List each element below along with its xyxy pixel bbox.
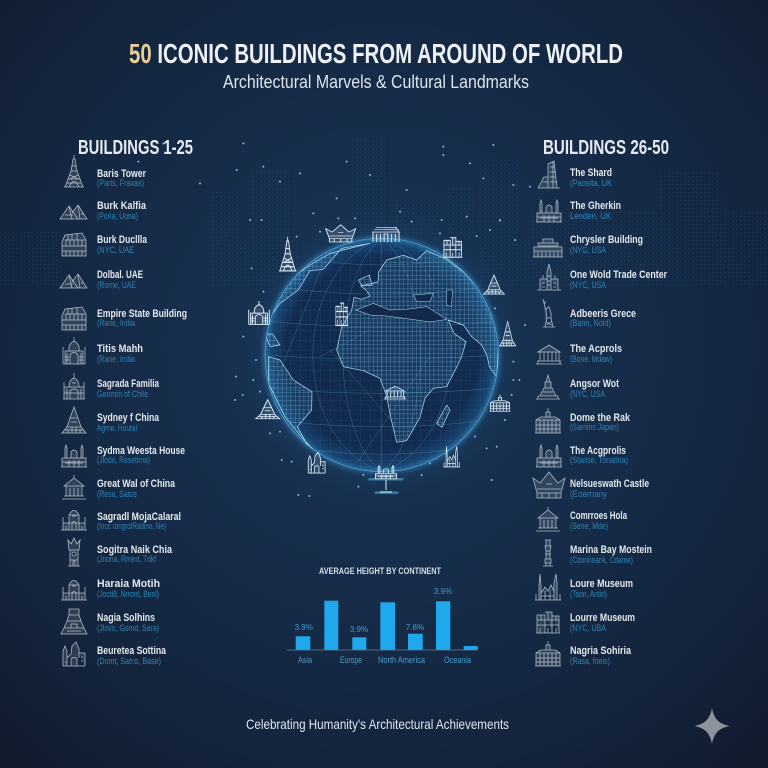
landmark: gate — [367, 227, 407, 244]
entry: Beuretea Sottina: (Domt, Satns, Base) — [97, 656, 161, 666]
globe grid lines — [263, 237, 500, 473]
entry: Burk Ducllla — [62, 233, 148, 256]
entry: Baris Tower — [64, 155, 147, 188]
entry: Burk Kalfia: (Porla, Uona) — [97, 211, 138, 221]
heading: buildings 26-50: BUILDINGS 26-50 — [543, 137, 669, 159]
continent labels: North America — [378, 655, 426, 666]
entry: The Acgprolis: (Stanse, Tonatina) — [570, 455, 628, 465]
entry: Beuretea Sottina — [63, 642, 167, 666]
entry: Empire State Building — [62, 307, 187, 330]
marker line on horn of africa — [438, 367, 469, 371]
landmark: building on africa — [380, 386, 410, 400]
entry: Chrysler Building: (NYG, USA — [570, 245, 606, 255]
South America — [268, 356, 314, 450]
entry: Angsor Wot — [536, 375, 619, 399]
landmark: pagoda — [480, 275, 507, 296]
entry: Chrysler Building: Chrysler Building — [570, 234, 643, 246]
entry: Lourre Museum — [536, 612, 635, 633]
entry: Chrysler Building — [533, 234, 643, 257]
entry: Loure Museum — [535, 574, 633, 600]
entry: Sagradl MojaCalaral: Sagradl MojaCalaral — [97, 511, 181, 523]
chart title: AVERAGE HEIGHT BY CONTINENT — [319, 566, 441, 577]
bars — [296, 601, 478, 650]
globe halo — [235, 208, 528, 502]
value labels: 3.9% — [295, 623, 313, 632]
sphere rim glow — [265, 238, 498, 472]
entry: Empire State Building: Empire State Building — [97, 308, 187, 320]
entry: Comrroes Hola: (Sene, Mde) — [570, 521, 608, 531]
subtitle: Architectural Marvels & Cultural Landmarks — [223, 72, 529, 92]
landmark: stupa — [498, 322, 520, 348]
entry: Adbeeris Grece — [543, 299, 636, 328]
globe with surrounding landmarks — [138, 143, 530, 502]
entry: Baris Tower: Baris Tower — [97, 168, 147, 180]
landmark: crown temple — [325, 225, 370, 245]
entry: Nelsueswath Castle: (Eoernany — [570, 489, 607, 499]
entry: Sydma Weesta House: (Jlodo, Resetima) — [97, 455, 150, 465]
Central America — [265, 334, 280, 347]
entry: Adbeeris Grece: Adbeeris Grece — [570, 308, 636, 320]
entry: Beuretea Sottina: Beuretea Sottina — [97, 645, 167, 657]
entry: Dolbal, UAE: Dolbal. UAE — [97, 269, 143, 281]
entry: Nelsueswath Castle — [533, 472, 649, 499]
continent labels — [298, 655, 472, 666]
sphere rim — [265, 238, 498, 472]
landmark: palace right — [483, 395, 515, 413]
entry: Titis Mahh: (Rane, India — [97, 354, 135, 364]
entry: The Gherkin: The Gherkin — [570, 200, 621, 212]
entry: The Acgprolis — [536, 445, 628, 467]
entry: Sogitra Naik Chia — [68, 538, 173, 566]
entry: The Gherkin: Lenden, UK — [570, 211, 611, 221]
panel: buildings 1-25 list — [60, 137, 193, 666]
axis line — [287, 649, 478, 651]
Eurasia and Africa — [337, 251, 499, 442]
entry: The Gherkin — [536, 200, 621, 222]
entry: Nagria Sohiria: Nagria Sohiria — [570, 645, 632, 657]
entry: Great Wal of China: Great Wal of China — [97, 478, 176, 490]
entry: Nagria Sohiria — [535, 641, 632, 666]
entry: Burk Kalfia: Burk Kalfia — [97, 200, 147, 212]
value labels: 7.8% — [406, 623, 424, 632]
entry: Nelsueswath Castle: Nelsueswath Castle — [570, 478, 649, 490]
entry: Sagradl MojaCalaral — [61, 510, 181, 531]
entry: Nagia Solhins: (Jlovo, Gomd, Sara) — [97, 623, 159, 633]
entry: Dome the Rak: Dome the Rak — [570, 412, 631, 424]
entry: Haraia Motih — [61, 578, 160, 600]
entry: Angsor Wot: (NYC, USA — [570, 389, 605, 399]
entry: Sogitra Naik Chia: Sogitra Naik Chia — [97, 544, 173, 556]
entry: The Acprols — [536, 343, 622, 364]
entry: Marina Bay Mostein: (Cdorinoarik, Cdame) — [570, 555, 633, 565]
entry: One Wold Trade Center: One Wold Trade Center — [570, 269, 668, 281]
entry: Angsor Wot: Angsor Wot — [570, 378, 619, 390]
continents — [265, 243, 499, 455]
entry: The Shard: The Shard — [570, 167, 612, 179]
entry: One Wold Trade Center: (NYC, USA — [570, 280, 606, 290]
entry: Sydney f China: Sydney f China — [97, 412, 160, 424]
entry: The Shard — [538, 161, 612, 188]
chart: average height by continent — [287, 566, 478, 666]
entry: The Acprols: (Bone. Mdaw) — [570, 354, 612, 364]
entry: Dolbal, UAE: (Rome, UAE — [97, 280, 136, 290]
entry: Comrroes Hola — [536, 507, 628, 531]
entry: Haraia Motih: (Jocti8, Nrront, Benl) — [97, 589, 159, 599]
entry: Sydney f China: Agme, Houtal — [97, 423, 137, 433]
scattered stars — [138, 143, 530, 496]
value labels — [295, 587, 452, 634]
entry: The Acgprolis: The Acgprolis — [570, 445, 626, 457]
faint dotted city skyline — [0, 140, 768, 285]
entry: Marina Bay Mostein — [543, 540, 652, 566]
panel: buildings 26-50 list — [533, 137, 669, 666]
entry: Nagria Sohiria: (Rasa, foeis) — [570, 656, 610, 666]
icon: four-point star — [694, 708, 730, 744]
entry: Sagrada Familia: Genmm of Chile — [97, 389, 148, 399]
entry: Marina Bay Mostein: Marina Bay Mostein — [570, 544, 652, 556]
entry: Sydma Weesta House — [61, 445, 185, 467]
entry: Sydney f China — [62, 407, 160, 433]
entry: Titis Mahh — [63, 337, 143, 364]
entry: The Shard: (Paosita, UK — [570, 178, 612, 188]
landmark: tower on africa — [327, 303, 357, 328]
entry: Burk Kalfia — [60, 200, 147, 221]
entry: Haraia Motih: Haraia Motih — [97, 578, 160, 590]
landmark: tower — [273, 237, 297, 273]
value labels: 3.9% — [434, 587, 452, 596]
continent labels: Asia — [298, 655, 313, 666]
entry: Comrroes Hola: Comrroes Hola — [570, 510, 628, 522]
entry: Lourre Museum: Lourre Museum — [570, 612, 635, 624]
entry: Nagia Solhins — [61, 609, 159, 634]
entry: Burk Ducllla: (NYC, UAE — [97, 245, 134, 255]
entry: Great Wal of China — [62, 475, 176, 499]
entry: Sagradl MojaCalaral: (Inoc rongrofRadino, Ne) — [97, 521, 166, 531]
entry: Lourre Museum: (NYC, UBA — [570, 623, 606, 633]
heading: buildings 1-25: BUILDINGS 1-25 — [78, 137, 193, 159]
entry: One Wold Trade Center — [537, 264, 668, 290]
continent labels: Europe — [340, 655, 362, 666]
Madagascar — [437, 405, 450, 427]
entry: Sagrada Familia — [63, 373, 160, 399]
entry: Sagrada Familia: Sagrada Familia — [97, 378, 160, 390]
entry: Nagia Solhins: Nagia Solhins — [97, 612, 155, 624]
landmark: spires — [438, 446, 466, 469]
footer tagline: Celebrating Humanity's Architectural Achievements — [246, 716, 509, 732]
entry: Empire State Building: (Rane, India — [97, 318, 135, 328]
entry: Titis Mahh: Titis Mahh — [97, 343, 143, 355]
entry: Dome the Rak: (Sarnins Japan) — [570, 422, 619, 432]
entry: The Acprols: The Acprols — [570, 343, 622, 355]
landmark: arch castle — [304, 452, 329, 474]
inland seas — [356, 290, 453, 322]
entry: Adbeeris Grece: (Bann, Nold) — [570, 318, 611, 328]
North America rim — [273, 243, 370, 313]
landmark: taj — [242, 301, 273, 327]
entry: Baris Tower: (Paris, Fraxas) — [97, 178, 144, 188]
landmark: skyscrapers — [440, 238, 468, 259]
entry: Burk Ducllla: Burk Ducllla — [97, 234, 148, 246]
entry: Sogitra Naik Chia: (Jnona, Rrrent, Tdkf — [97, 554, 156, 564]
Britain — [358, 275, 372, 285]
landmark: small temple — [253, 400, 283, 420]
landmark: bottom fountain building — [368, 466, 403, 493]
entry: Loure Museum: (Toon, Antid) — [570, 589, 607, 599]
continent labels: Oceania — [444, 655, 472, 666]
entry: Dolbal, UAE — [60, 269, 143, 290]
value labels: 3.9% — [350, 625, 368, 634]
entry: Loure Museum: Loure Museum — [570, 578, 633, 590]
sphere body — [265, 238, 498, 472]
entry: Great Wal of China: (Resu, Satce — [97, 489, 137, 499]
entry: Sydma Weesta House: Sydma Weesta House — [97, 445, 185, 457]
entry: Dome the Rak — [535, 408, 631, 433]
